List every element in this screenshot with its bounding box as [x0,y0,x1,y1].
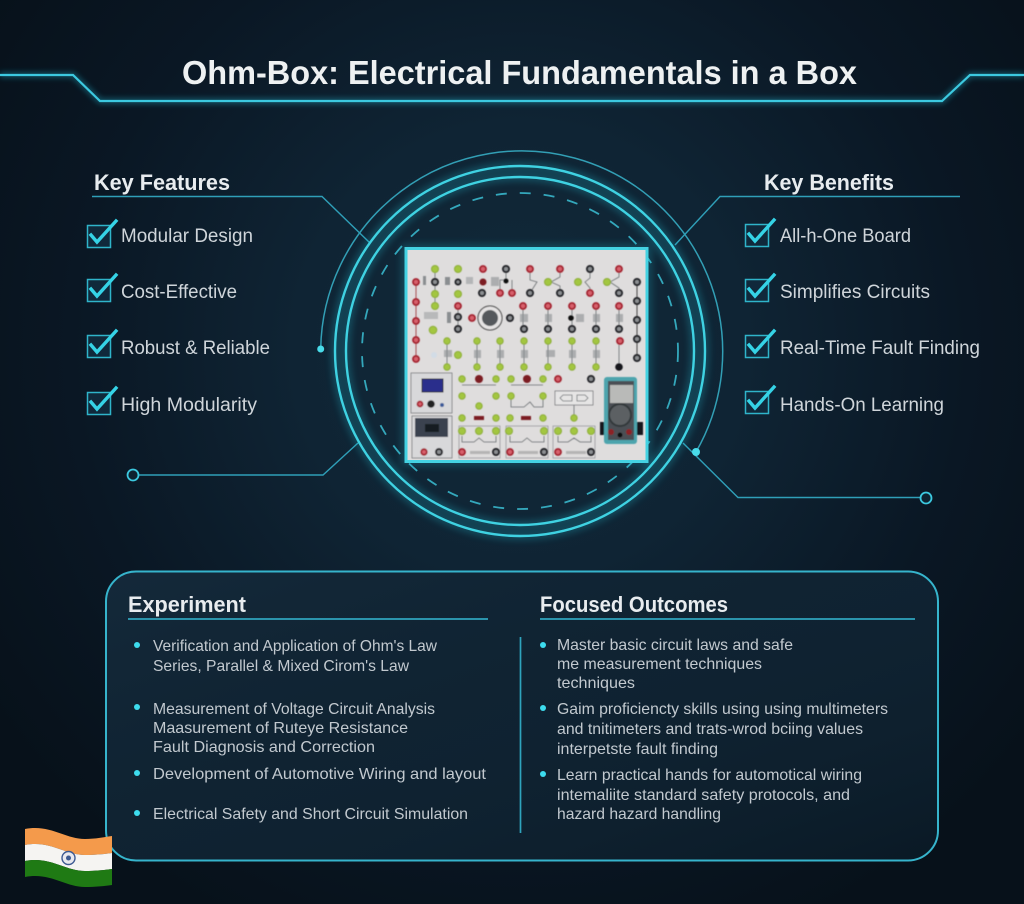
circular meter [478,306,502,330]
heading: focused outcomes: Focused Outcomes [540,592,728,617]
list: key benefits [746,220,980,416]
list: outcomes [540,637,888,823]
panel: experiment and outcomes [106,572,938,860]
experiment item 3: Development of Automotive Wiring and layout [153,766,487,783]
outcome item 1: Master basic circuit laws and safe [557,637,793,654]
central rings [321,151,723,536]
thin arc [321,151,723,452]
outcome item 2: interpetste fault finding [557,741,718,758]
feature: robust and reliable: Robust & Reliable [121,338,270,359]
bullet [134,642,140,648]
icon: checkbox [746,220,774,246]
connector dots [128,346,932,504]
ring glow [335,166,705,536]
board plate [406,248,647,462]
experiment item 1 [153,638,437,675]
title: Ohm-Box: Electrical Fundamentals in a Box [182,54,858,91]
experiment item 2: Fault Diagnosis and Correction [153,739,375,756]
outcome item 1: techniques [557,675,635,692]
power module [412,416,452,458]
icon: india flag [25,828,112,887]
outcome item 3: intemaliite standard safety protocols, and [557,787,850,804]
lower terminals [458,375,595,458]
outcome item 2: Gaim proficiencty skills using using multimeters [557,701,888,718]
experiment item 4: Electrical Safety and Short Circuit Simulation [153,806,468,823]
experiment item 2: Measurement of Voltage Circuit Analysis [153,701,435,718]
wiring traces [416,269,637,442]
column divider [520,637,522,833]
top header line [0,75,1024,101]
connector lines [92,196,960,498]
arrow box [555,391,593,405]
bullet [540,771,546,777]
list: experiments [134,638,487,823]
top terminals [413,266,640,371]
experiment item 2: Maasurement of Ruteye Resistance [153,720,408,737]
inner ring [346,177,694,525]
benefit: all-in-one board: All-h-One Board [780,226,911,247]
icon: checkbox [88,221,116,248]
trainer board [405,248,648,462]
icon: checkbox [88,275,116,302]
panel border [106,572,938,860]
dashed ring [362,193,678,509]
small symbols [423,276,623,358]
outcome item 3: hazard hazard handling [557,806,721,823]
outcome item 3 [557,767,862,823]
list: key features [88,221,270,416]
feature: modular design: Modular Design [121,226,253,247]
benefit: simplifies circuits: Simplifies Circuits [780,282,930,303]
outcome item 1: me measurement techniques [557,656,762,673]
heading underlines [128,618,915,620]
bullet [134,770,140,776]
icon: checkbox [88,388,116,414]
bullet [134,810,140,816]
outer ring [335,166,705,536]
outcome item 2 [557,701,888,758]
multimeter [600,377,643,444]
experiment item 2 [153,701,435,756]
experiment item 1: Series, Parallel & Mixed Cirom's Law [153,658,409,675]
benefit: real-time fault finding: Real-Time Fault Finding [780,338,980,359]
icon: checkbox [746,331,774,358]
heading: key benefits: Key Benefits [764,170,894,195]
outcome item 3: Learn practical hands for automotical wiring [557,767,862,784]
heading: key features: Key Features [94,170,230,195]
bullet [540,705,546,711]
feature: cost-effective: Cost-Effective [121,282,237,303]
icon: checkbox [746,275,774,302]
bullet [540,642,546,648]
icon: checkbox [88,331,116,358]
bullet [134,704,140,710]
voltmeter module [411,373,452,413]
outcome item 1 [557,637,793,692]
experiment item 1: Verification and Application of Ohm's Law [153,638,437,655]
benefit: hands-on learning: Hands-On Learning [780,395,944,416]
icon: checkbox [746,387,774,414]
board glow [405,248,648,462]
feature: high modularity: High Modularity [121,395,258,416]
outcome item 2: and tnitimeters and trats-wrod bciing values [557,721,863,738]
heading: experiment: Experiment [128,592,247,617]
